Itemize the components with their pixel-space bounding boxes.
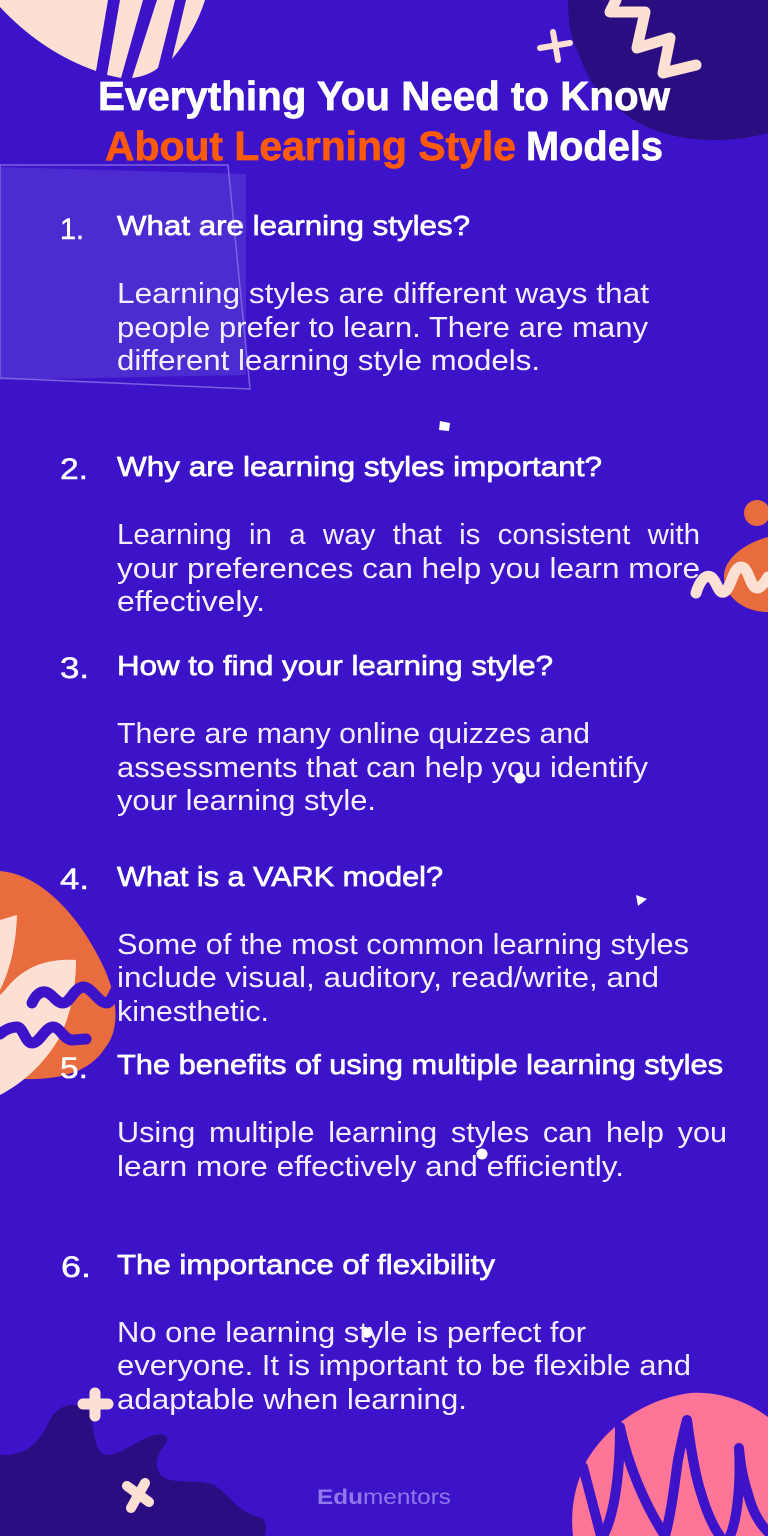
title: Models [526,123,663,169]
section 1: what are learning styles [60,210,649,377]
section 6: importance of flexibility: No one learning style is perfect for [117,1317,586,1349]
section 3: how to find your learning style: 3. [60,652,89,685]
section 3: how to find your learning style: How to find your learning style? [117,650,553,681]
decoration: orange leaf blob left [0,871,116,1095]
title: Everything You Need to Know [98,73,670,119]
section 1: what are learning styles: Learning styles are different ways that [117,278,649,310]
section 1: what are learning styles: people prefer to learn. There are many [117,312,649,344]
section 2: why learning styles are important: effectively. [117,586,265,618]
section 4: what is a VARK model: include visual, auditory, read/write, and [117,962,659,994]
section 3: how to find your learning style: There are many online quizzes and [117,718,590,750]
section 2: why learning styles are important: Learning in a way that is consistent with [117,519,700,551]
icon: cross bottom left [127,1483,149,1508]
section 1: what are learning styles: 1. [60,213,84,246]
decoration: peach zigzag top right [610,0,696,73]
section 5: benefits of multiple learning styles: 5. [60,1052,88,1085]
section 5: benefits of multiple learning styles: learn more effectively and efficiently. [117,1151,624,1183]
section 6: importance of flexibility: adaptable when learning. [117,1384,467,1416]
section 4: what is a VARK model: Some of the most common learning styles [117,929,689,961]
decoration: orange blob right [724,500,768,612]
section 6: importance of flexibility [61,1249,691,1416]
title: About Learning Style [105,123,516,169]
section 4: what is a VARK model [60,861,689,1028]
section 5: benefits of multiple learning styles: Using multiple learning styles can help you [117,1117,727,1149]
section 2: why learning styles are important: your preferences can help you learn more [117,553,700,585]
decoration: pink circle with spikes bottom right [572,1393,768,1536]
section 1: what are learning styles: different learning style models. [117,345,540,377]
section 4: what is a VARK model: What is a VARK model? [117,861,443,892]
decoration: translucent square [0,165,250,389]
section 2: why learning styles are important [60,451,700,618]
icon: plus bottom left [83,1393,108,1416]
decoration: small white specks [362,421,647,1338]
decoration: peach striped circle top left [0,0,205,78]
icon: plus top right [540,32,570,60]
section 6: importance of flexibility: everyone. It is important to be flexible and [117,1350,691,1382]
section 5: benefits of multiple learning styles [60,1049,727,1183]
section 3: how to find your learning style: assessments that can help you identify [117,752,649,784]
section 1: what are learning styles: What are learning styles? [117,210,470,241]
title [98,73,670,169]
section 3: how to find your learning style [60,650,649,817]
section 5: benefits of multiple learning styles: The benefits of using multiple learning styles [117,1049,723,1080]
section 3: how to find your learning style: your learning style. [117,785,376,817]
decoration: peach wave right [696,567,768,593]
section 2: why learning styles are important: 2. [60,453,88,486]
section 4: what is a VARK model: 4. [60,863,89,896]
logo: Edumentors: Edu mentors [317,1486,451,1509]
decoration: dark blob top right [568,0,768,140]
decoration: dark blob bottom left [0,1405,266,1536]
section 4: what is a VARK model: kinesthetic. [117,996,269,1028]
section 6: importance of flexibility: 6. [61,1251,91,1284]
section 2: why learning styles are important: Why are learning styles important? [117,451,602,482]
section 6: importance of flexibility: The importance of flexibility [117,1249,495,1280]
